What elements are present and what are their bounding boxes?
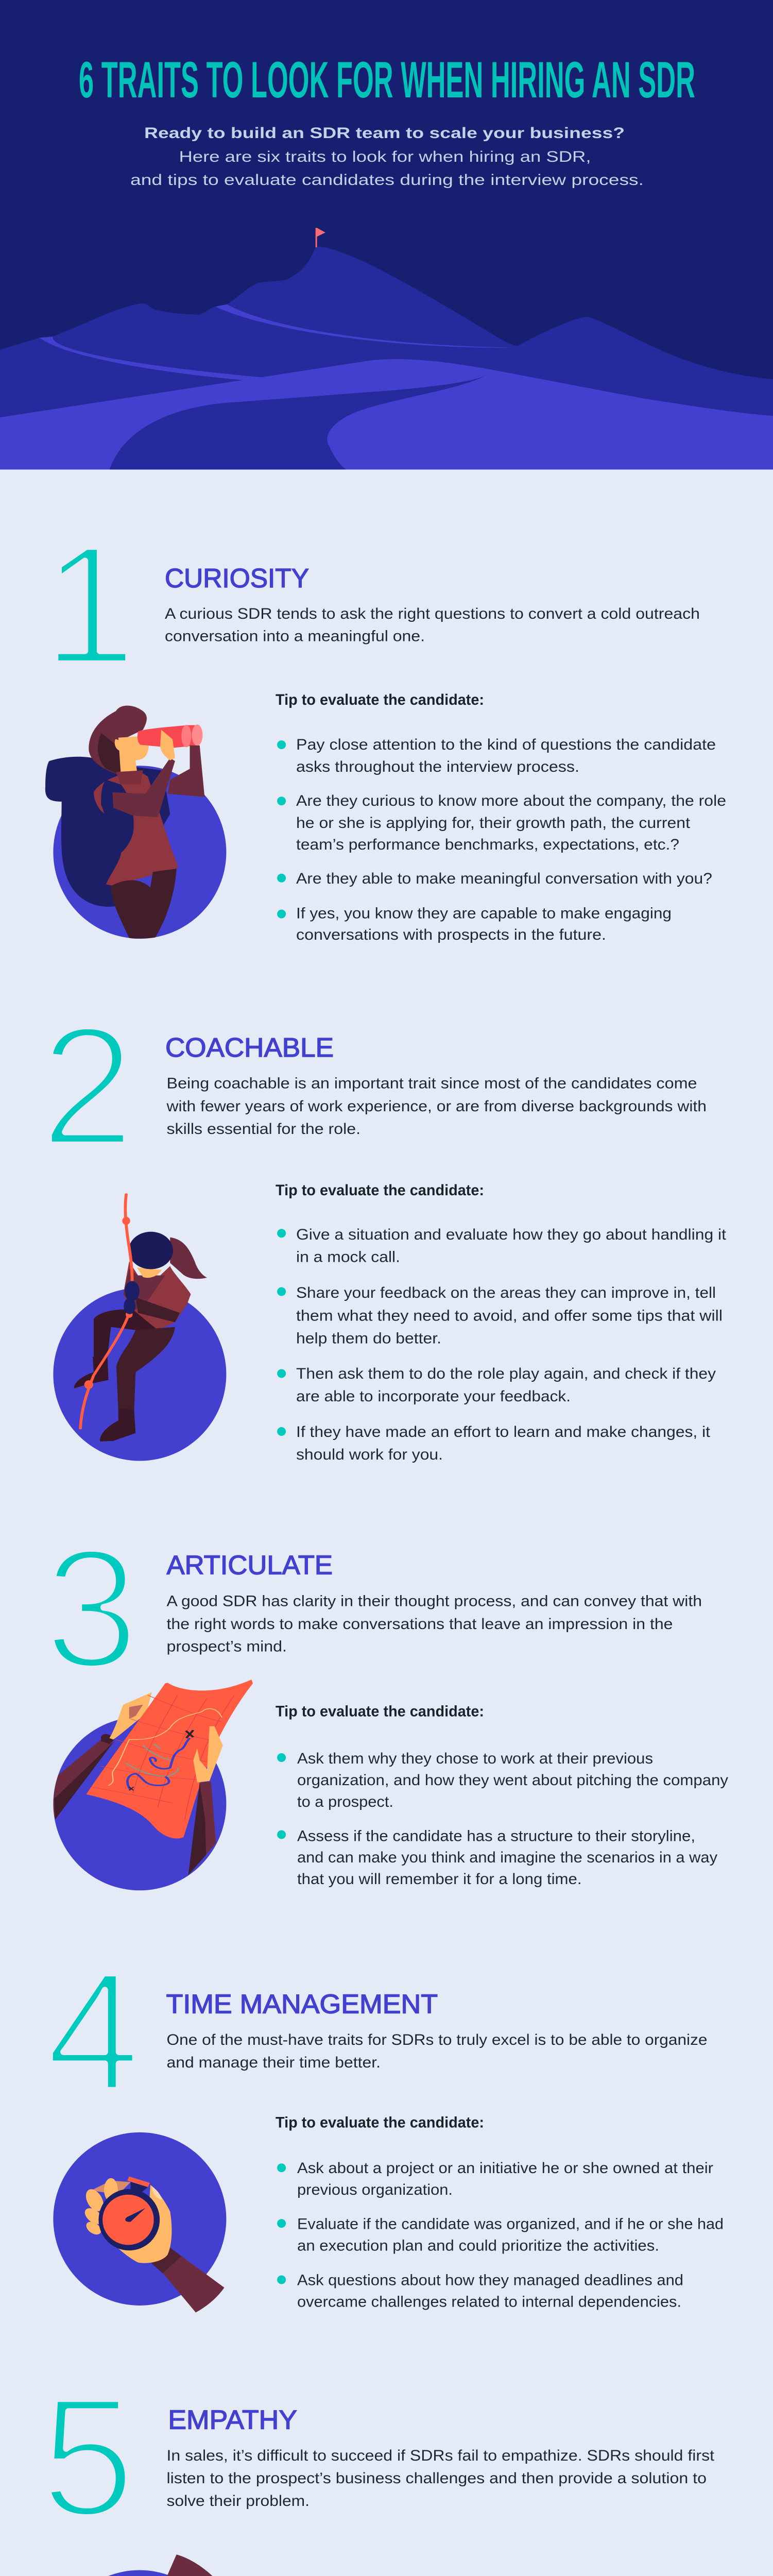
heading: coachable: COACHABLE	[165, 1033, 334, 1063]
description: A good SDR has clarity in their thought process, and can convey that with	[167, 1593, 702, 1610]
description: and manage their time better.	[167, 2054, 381, 2071]
tip 3	[277, 1365, 716, 1405]
tip 2: Assess if the candidate has a structure to their storyline,	[297, 1827, 695, 1844]
number 4: 4	[46, 1936, 141, 2126]
tips heading: Tip to evaluate the candidate:	[276, 691, 484, 708]
intro text: and tips to evaluate candidates during the interview process.	[130, 172, 644, 189]
number 5: 5	[41, 2362, 135, 2552]
tips	[276, 2114, 724, 2311]
illustration: hands holding a map	[53, 1680, 253, 1890]
number 2: 2	[40, 991, 135, 1181]
description: A curious SDR tends to ask the right questions to convert a cold outreach	[165, 605, 700, 622]
tip 2: and can make you think and imagine the scenarios in a way	[297, 1849, 717, 1866]
heading: empathy: EMPATHY	[168, 2405, 297, 2435]
tips heading: Tip to evaluate the candidate:	[276, 1703, 484, 1720]
description: Being coachable is an important trait since most of the candidates come	[167, 1075, 697, 1092]
panel: trait 2 coachable	[40, 991, 727, 1463]
illustration: clasped hands	[53, 2554, 226, 2576]
panel: trait 3 articulate	[44, 1513, 728, 1890]
tips heading: Tip to evaluate the candidate:	[276, 2114, 484, 2131]
intro text: Ready to build an SDR team to scale your business?	[144, 125, 625, 142]
number 3: 3	[44, 1513, 139, 1703]
description: One of the must-have traits for SDRs to truly excel is to be able to organize	[167, 2031, 708, 2048]
tip 1: Ask about a project or an initiative he or she owned at their	[297, 2160, 713, 2177]
tip 4: If they have made an effort to learn and make changes, it	[296, 1423, 711, 1440]
description	[165, 605, 700, 645]
tip 4	[277, 1423, 711, 1463]
description: solve their problem.	[167, 2493, 310, 2510]
tip 3: Ask questions about how they managed deadlines and	[297, 2272, 683, 2289]
tip 2	[277, 2215, 724, 2255]
tip 2: Are they curious to know more about the company, the role	[296, 792, 726, 809]
number 1: 1	[42, 510, 137, 700]
illustration: hand holding stopwatch	[53, 2132, 226, 2313]
tip 2	[277, 792, 726, 853]
tip 3	[277, 2272, 683, 2311]
tip 3: Are they able to make meaningful conversation with you?	[296, 870, 712, 887]
tip 4: conversations with prospects in the future.	[296, 926, 606, 943]
heading: articulate: ARTICULATE	[167, 1551, 333, 1581]
tip 2	[277, 1827, 717, 1888]
intro text: Here are six traits to look for when hiring an SDR,	[179, 148, 591, 165]
description: the right words to make conversations that leave an impression in the	[167, 1616, 673, 1633]
tips	[276, 1182, 727, 1463]
tip 4: should work for you.	[296, 1446, 443, 1463]
tip 2: them what they need to avoid, and offer some tips that will	[296, 1308, 723, 1324]
tip 2: Evaluate if the candidate was organized, and if he or she had	[297, 2215, 724, 2232]
illustration: mountain landscape with flag	[0, 228, 773, 469]
illustration: hiker with binoculars	[45, 706, 226, 939]
description	[166, 1075, 707, 1138]
tip 1: previous organization.	[297, 2181, 453, 2198]
panel: trait 5 empathy	[41, 2362, 724, 2576]
intro text	[130, 125, 644, 189]
tip 1: organization, and how they went about pitching the company	[297, 1772, 728, 1789]
tips	[276, 1703, 728, 1888]
description	[167, 2447, 715, 2510]
tip 2: team’s performance benchmarks, expectations, etc.?	[296, 836, 679, 853]
tip 3: Then ask them to do the role play again, and check if they	[296, 1365, 716, 1382]
description: listen to the prospect’s business challenges and then provide a solution to	[167, 2470, 707, 2487]
description: with fewer years of work experience, or are from diverse backgrounds with	[166, 1098, 707, 1115]
description: In sales, it’s difficult to succeed if SDRs fail to empathize. SDRs should first	[167, 2447, 715, 2464]
tip 1: Give a situation and evaluate how they go about handling it	[296, 1226, 727, 1243]
tip 2: Share your feedback on the areas they can improve in, tell	[296, 1284, 716, 1301]
tip 2	[277, 1284, 723, 1347]
tip 4	[277, 905, 672, 943]
panel: hero header	[0, 0, 773, 469]
tip 3: are able to incorporate your feedback.	[296, 1388, 571, 1405]
tip 1	[277, 2160, 713, 2198]
tip 1: Pay close attention to the kind of questions the candidate	[296, 736, 716, 753]
tip 2: that you will remember it for a long time.	[297, 1871, 582, 1888]
description	[167, 1593, 702, 1655]
description: conversation into a meaningful one.	[165, 628, 425, 645]
panel: trait 4 time management	[46, 1936, 724, 2313]
tip 1: in a mock call.	[296, 1249, 400, 1265]
tip 1	[277, 1750, 728, 1810]
description: skills essential for the role.	[167, 1121, 360, 1138]
illustration: climber on rope	[53, 1194, 226, 1461]
panel: trait 1 curiosity	[42, 510, 726, 943]
tip 3: overcame challenges related to internal dependencies.	[297, 2294, 681, 2311]
tip 1	[277, 1226, 727, 1265]
tip 1: asks throughout the interview process.	[296, 758, 579, 775]
description	[167, 2031, 708, 2071]
tips	[276, 691, 726, 943]
tip 2: an execution plan and could prioritize the activities.	[297, 2238, 659, 2255]
tip 1: to a prospect.	[297, 1793, 393, 1810]
tip 4: If yes, you know they are capable to make engaging	[296, 905, 672, 922]
tip 1: Ask them why they chose to work at their previous	[297, 1750, 653, 1767]
tip 2: help them do better.	[296, 1330, 441, 1347]
description: prospect’s mind.	[167, 1638, 287, 1655]
heading: curiosity: CURIOSITY	[165, 564, 309, 594]
tip 2: he or she is applying for, their growth path, the current	[296, 815, 691, 832]
tips heading: Tip to evaluate the candidate:	[276, 1182, 484, 1199]
tip 1	[277, 736, 716, 775]
heading: time management: TIME MANAGEMENT	[166, 1989, 438, 2019]
